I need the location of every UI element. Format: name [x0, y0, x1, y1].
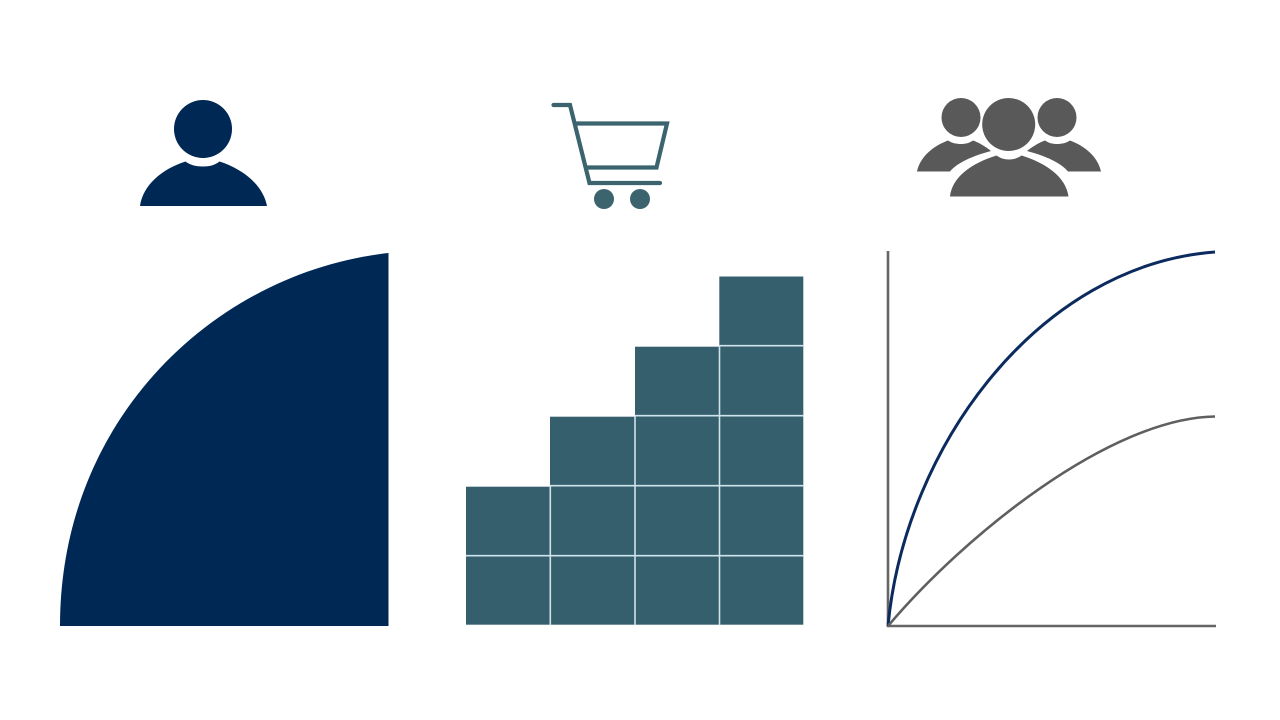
block column 1 — [466, 487, 550, 625]
curve: lower grey — [888, 416, 1215, 626]
block column 2 — [550, 417, 636, 625]
icon: shopping cart — [554, 105, 667, 209]
curve: upper navy — [888, 252, 1215, 626]
icon: single person — [140, 100, 267, 206]
chart: filled concave area — [60, 253, 388, 626]
chart: line graph with two curves — [888, 251, 1216, 626]
block column 3 — [635, 347, 720, 625]
block column 4 — [719, 276, 803, 625]
icon: group of people — [917, 98, 1101, 196]
chart axes — [888, 251, 1216, 626]
chart: stepped block grid — [466, 276, 803, 625]
